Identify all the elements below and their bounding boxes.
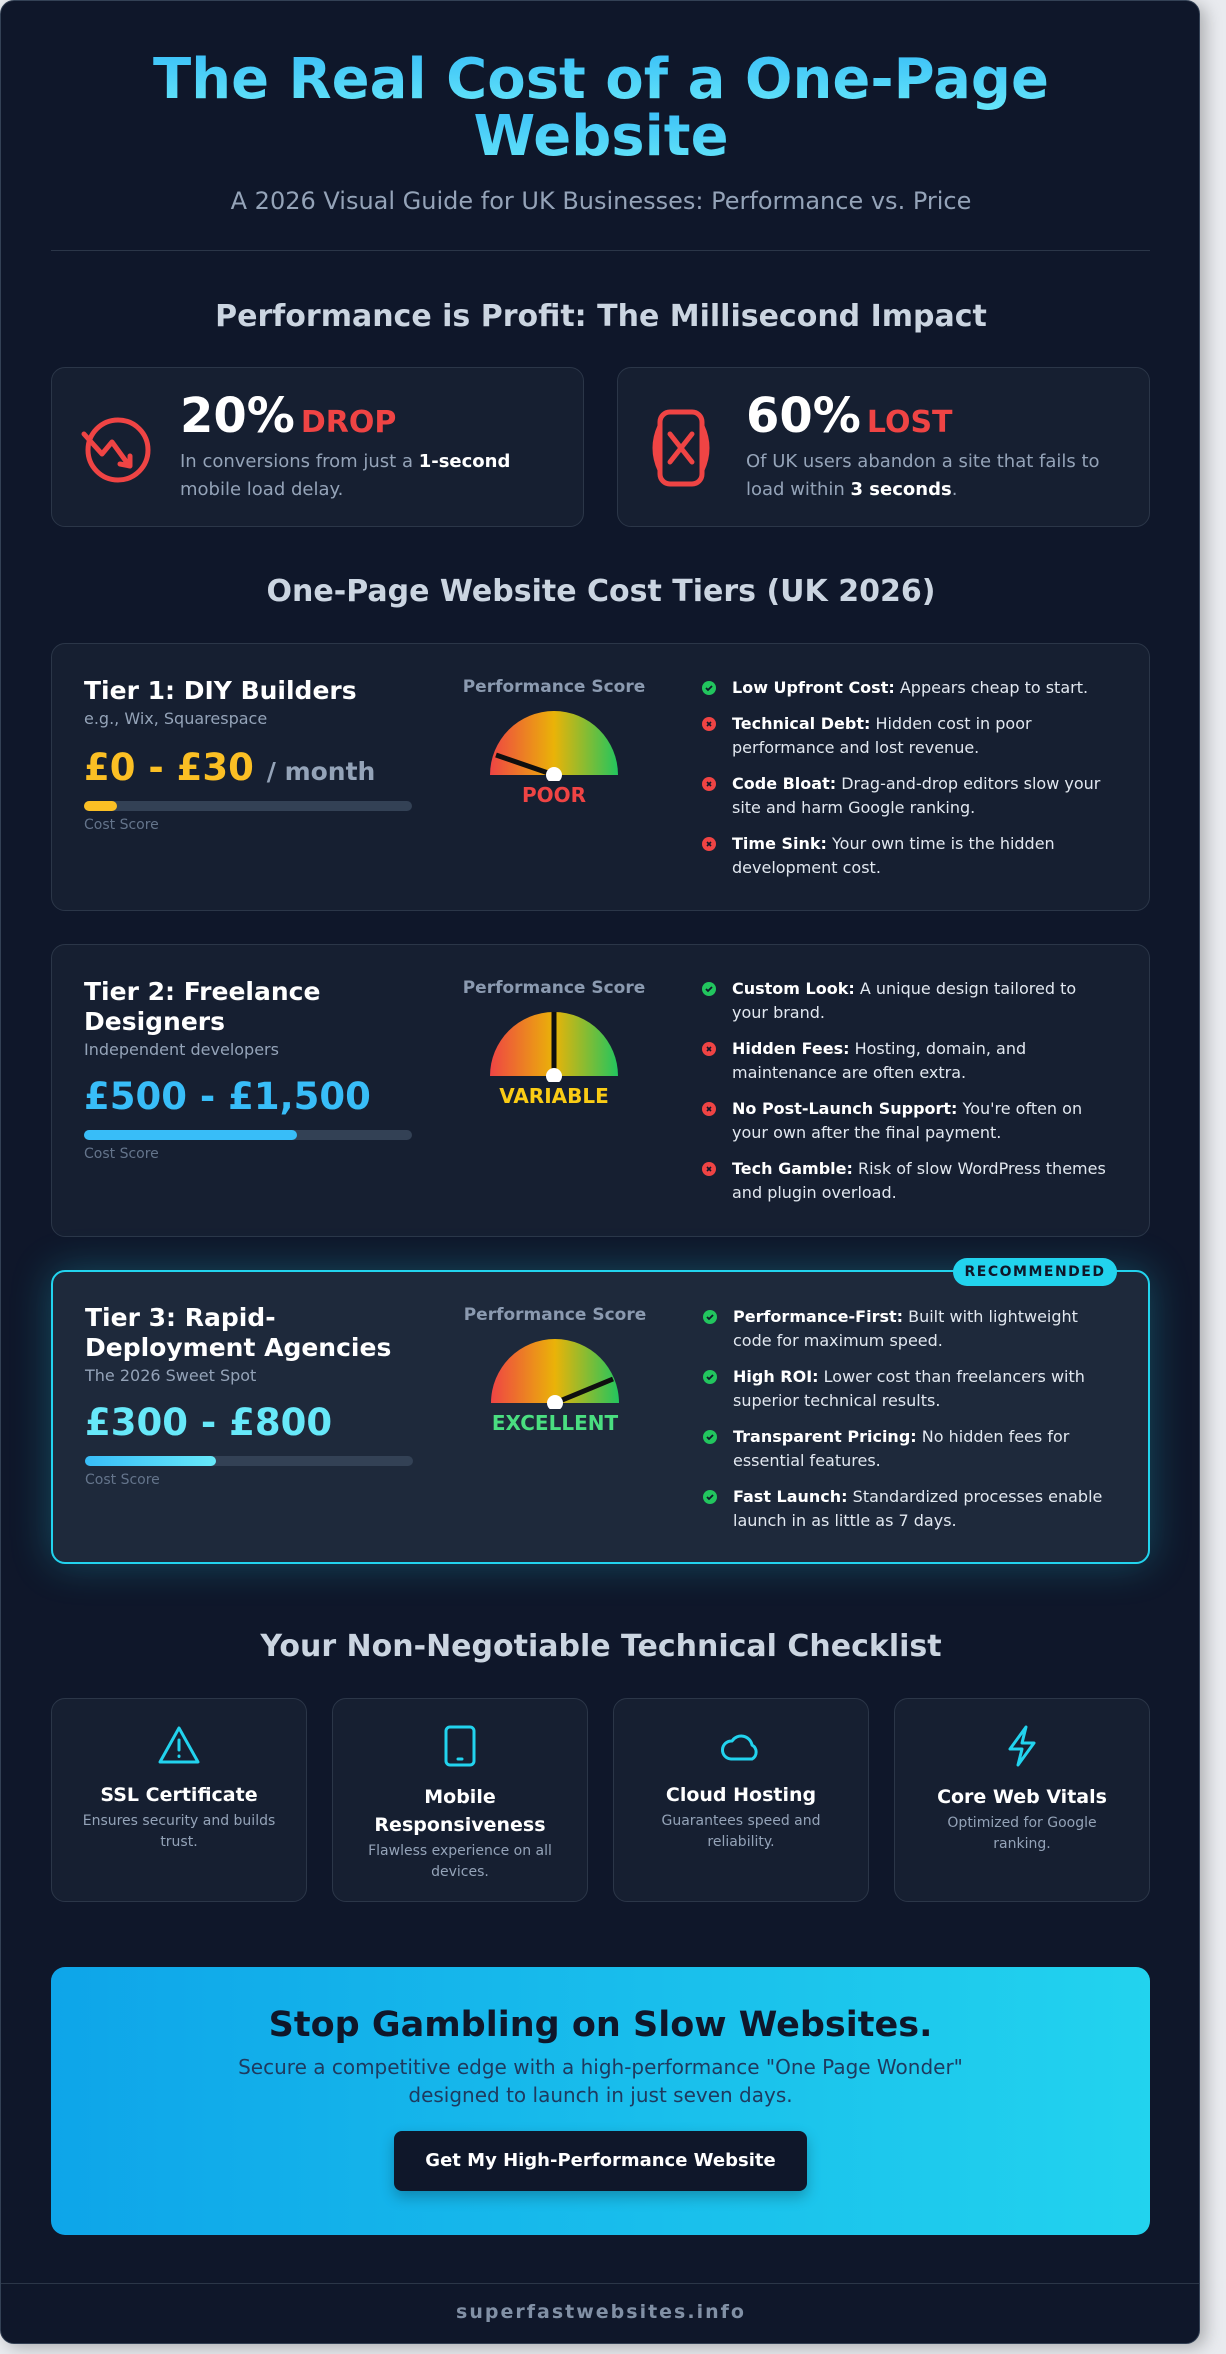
gauge: excellent (464, 1305, 646, 1435)
panel: tier 2 (51, 944, 1150, 1237)
title: Website (473, 104, 729, 169)
tier 3 info (84, 1303, 413, 1488)
checklist card: cloud: Guarantees speed and reliability. (661, 1813, 821, 1850)
checklist card: core web vitals: Core Web Vitals (937, 1786, 1107, 1808)
badge: recommended (953, 1258, 1117, 1286)
tier 2 info (84, 977, 412, 1162)
gauge: poor: Performance Score (463, 677, 645, 697)
subtitle: A 2026 Visual Guide for UK Businesses: Performance vs. Price (231, 187, 971, 215)
stat card: 60% lost: Of UK users abandon a site that fails to load within 3 seconds. (746, 451, 1100, 500)
tier 3 info: The 2026 Sweet Spot (85, 1366, 256, 1385)
tier 3 info: £300 - £800 (85, 1401, 332, 1444)
tier 3 info: Cost Score (85, 1472, 160, 1488)
stat card: 20% drop (51, 367, 584, 527)
checklist card: mobile: Mobile Responsiveness (374, 1786, 546, 1836)
footer: superfastwebsites.info (456, 2301, 746, 2323)
checklist card: SSL: SSL Certificate (100, 1784, 258, 1806)
tier 2 info: Independent developers (84, 1040, 279, 1059)
tier 1 info: Cost Score (84, 817, 159, 833)
gauge: variable: Performance Score (463, 978, 645, 998)
stat text: 60%LOST (746, 388, 953, 444)
tier 1 info: Tier 1: DIY Builders (84, 676, 357, 705)
tier 3 info: Tier 3: Rapid-Deployment Agencies (85, 1303, 391, 1362)
list: tier 1 points: Time Sink: Your own time is the hidden development cost. (732, 834, 1055, 877)
gauge: poor (463, 677, 645, 807)
CTA heading: Stop Gambling on Slow Websites. (269, 2005, 932, 2045)
icon: cloud (721, 1734, 758, 1760)
tier 1 info: e.g., Wix, Squarespace (84, 709, 267, 728)
title (153, 47, 1049, 169)
list: tier 1 points (702, 678, 1100, 877)
checklist card: core web vitals: Optimized for Google ranking. (947, 1815, 1097, 1852)
icon: phone (444, 1726, 476, 1766)
badge: recommended: RECOMMENDED (965, 1264, 1105, 1280)
checklist card: core web vitals (894, 1698, 1150, 1902)
panel: tier 3 recommended (51, 1270, 1150, 1564)
stat card: 20% drop: In conversions from just a 1-second mobile load delay. (180, 451, 510, 500)
list: tier 3 points: Fast Launch: Standardized processes enable launch in as little as 7 days. (733, 1487, 1102, 1530)
checklist card: cloud: Cloud Hosting (666, 1784, 816, 1806)
stat text: 20%DROP (180, 388, 396, 444)
list: tier 2 points: Custom Look: A unique design tailored to your brand. (732, 979, 1076, 1022)
tier 1 info (84, 676, 412, 833)
list: tier 3 points: Transparent Pricing: No hidden fees for essential features. (733, 1427, 1069, 1470)
list: tier 1 points: Low Upfront Cost: Appears cheap to start. (732, 678, 1088, 697)
heading: cost tiers: One-Page Website Cost Tiers (UK 2026) (267, 574, 935, 609)
gauge: excellent: Performance Score (464, 1305, 646, 1325)
gauge: variable: VARIABLE (499, 1084, 609, 1108)
checklist card: SSL: Ensures security and builds trust. (83, 1813, 275, 1850)
tier 2 info: Cost Score (84, 1146, 159, 1162)
list: tier 3 points (703, 1307, 1102, 1530)
list: tier 1 points: Technical Debt: Hidden cost in poor performance and lost revenue. (732, 714, 1032, 757)
list: tier 2 points: Hidden Fees: Hosting, domain, and maintenance are often extra. (732, 1039, 1026, 1082)
list: tier 2 points: Tech Gamble: Risk of slow WordPress themes and plugin overload. (732, 1159, 1106, 1202)
CTA text: Secure a competitive edge with a high-performance "One Page Wonder" designed to launch in just seven days. (238, 2055, 963, 2107)
icon: phone with x (652, 410, 710, 486)
CTA panel (51, 1967, 1150, 2235)
list: tier 3 points: High ROI: Lower cost than freelancers with superior technical results. (733, 1367, 1085, 1410)
checklist card: cloud (613, 1698, 869, 1902)
heading: performance is profit: Performance is Profit: The Millisecond Impact (215, 299, 987, 334)
title: The Real Cost of a One-Page (153, 47, 1049, 112)
tier 2 info: £500 - £1,500 (84, 1075, 371, 1118)
gauge: excellent: EXCELLENT (492, 1411, 618, 1435)
CTA button (394, 2131, 807, 2191)
gauge: poor: POOR (522, 783, 586, 807)
checklist card: mobile: Flawless experience on all devices. (368, 1843, 552, 1880)
list: tier 3 points: Performance-First: Built with lightweight code for maximum speed. (733, 1307, 1078, 1350)
CTA button: Get My High-Performance Website (425, 2150, 776, 2171)
icon: trending down (82, 418, 150, 482)
panel: tier 1 (51, 643, 1150, 911)
gauge: variable (463, 978, 645, 1108)
stat card: 60% lost (617, 367, 1150, 527)
list: tier 2 points (702, 979, 1106, 1202)
tier 1 info: £0 - £30 / month (84, 746, 375, 789)
list: tier 1 points: Code Bloat: Drag-and-drop editors slow your site and harm Google ranking. (732, 774, 1100, 817)
checklist card: SSL (51, 1698, 307, 1902)
list: tier 2 points: No Post-Launch Support: You're often on your own after the final payment. (732, 1099, 1082, 1142)
icon: warning triangle (158, 1726, 200, 1764)
heading: checklist: Your Non-Negotiable Technical Checklist (260, 1629, 942, 1664)
icon: lightning (1008, 1726, 1036, 1766)
tier 2 info: Tier 2: Freelance Designers (84, 977, 320, 1036)
checklist card: mobile (332, 1698, 588, 1902)
